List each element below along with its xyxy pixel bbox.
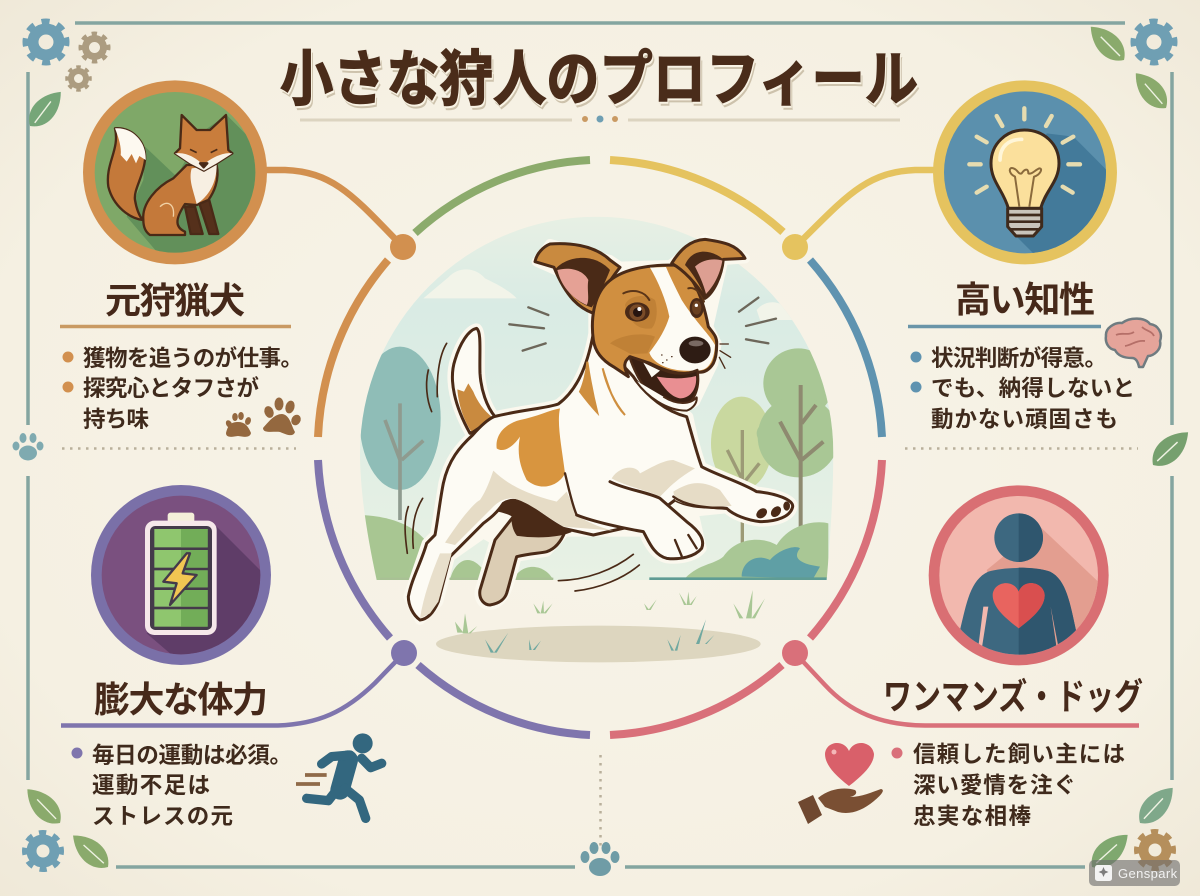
bullet text: 探究心とタフさが xyxy=(83,375,259,401)
dog belly shading xyxy=(445,471,613,545)
dog tail xyxy=(452,328,495,433)
dog ear right xyxy=(672,239,745,298)
dog mouth xyxy=(629,357,698,411)
icon: heart in hand xyxy=(798,743,883,824)
dog whiskers xyxy=(662,344,731,368)
bullet text: 状況判断が得意。 xyxy=(931,345,1107,371)
divider: dotted left xyxy=(62,447,296,450)
bullet text: ストレスの元 xyxy=(92,804,233,829)
watermark: Genspark xyxy=(1118,866,1178,881)
underline xyxy=(60,325,291,328)
dog body xyxy=(408,333,793,620)
icon: gears top left xyxy=(26,22,108,90)
panel: one-man dog xyxy=(798,676,1143,829)
icon: brain xyxy=(1106,319,1161,367)
divider: dotted right xyxy=(905,447,1138,450)
dog face blaze xyxy=(649,267,715,371)
bullet text: 信頼した飼い主には xyxy=(913,742,1125,767)
heading: 元狩猟犬 xyxy=(105,280,245,321)
underline xyxy=(908,325,1101,328)
panel: high intelligence xyxy=(908,279,1161,432)
dog chest shading xyxy=(612,460,695,497)
bullet text xyxy=(72,743,292,829)
bullet text: 持ち味 xyxy=(83,407,149,432)
icon: paw bottom center xyxy=(580,842,620,876)
medallion: fox xyxy=(83,80,267,267)
heading: ワンマンズ・ドッグ xyxy=(883,676,1143,717)
medallion: person with heart xyxy=(929,485,1109,670)
grass tufts xyxy=(455,590,765,633)
divider: dotted bottom center xyxy=(599,755,602,850)
icon: paws xyxy=(225,398,303,437)
icon: runner xyxy=(296,733,382,818)
dog paw pads xyxy=(754,501,790,521)
dog silhouette halo xyxy=(408,239,793,620)
park background xyxy=(359,213,840,580)
dog nose xyxy=(679,337,711,363)
title divider xyxy=(300,116,900,122)
icon: paw left edge xyxy=(12,433,44,460)
medallion: light bulb xyxy=(933,80,1117,267)
dog ear left xyxy=(535,244,620,313)
icon: person xyxy=(960,513,1077,660)
dog far hind leg xyxy=(480,517,565,605)
bullet text: 忠実な相棒 xyxy=(913,804,1031,829)
icon: bulb xyxy=(991,130,1059,236)
panel: vast stamina xyxy=(72,679,382,829)
dog head xyxy=(592,265,717,377)
connector: fox to ring xyxy=(262,170,416,260)
connector: bulb to ring xyxy=(782,170,936,260)
dog back patch xyxy=(497,408,565,487)
icon: battery xyxy=(145,513,217,635)
medallion: battery xyxy=(91,485,271,670)
illustration: running dog in park xyxy=(359,213,840,662)
bullet text: 動かない頑固さも xyxy=(931,407,1118,432)
title: 小さな狩人のプロフィール xyxy=(280,46,918,113)
icon: fox xyxy=(108,115,232,235)
bullet text: 運動不足は xyxy=(92,773,210,798)
ground shadow xyxy=(436,626,761,662)
dog belly shadow xyxy=(495,500,571,537)
connector: battery to ring xyxy=(61,640,417,726)
bullet text xyxy=(62,345,303,432)
panel: former hunting dog xyxy=(60,280,303,437)
central ring xyxy=(318,160,882,735)
dog near foreleg xyxy=(577,482,703,559)
bullet text xyxy=(892,742,1125,829)
icon: gear bottom right xyxy=(1137,832,1173,868)
connector: heart to ring xyxy=(782,640,1139,726)
heading: 膨大な体力 xyxy=(94,679,268,720)
bulb rays xyxy=(969,108,1080,193)
heading: 高い知性 xyxy=(955,279,1095,320)
dog eyes xyxy=(625,298,704,322)
icon: gear top right xyxy=(1134,22,1174,62)
motion lines xyxy=(509,298,776,351)
bullet text xyxy=(910,345,1135,432)
icon: gear bottom left xyxy=(25,833,61,869)
bullet text: 深い愛情を注ぐ xyxy=(913,773,1076,798)
bullet text: 毎日の運動は必須。 xyxy=(92,743,292,768)
watermark xyxy=(1089,860,1180,886)
bullet text: でも、納得しないと xyxy=(931,376,1135,401)
dog neck streaks xyxy=(580,362,625,415)
bullet text: 獲物を追うのが仕事。 xyxy=(83,345,303,371)
